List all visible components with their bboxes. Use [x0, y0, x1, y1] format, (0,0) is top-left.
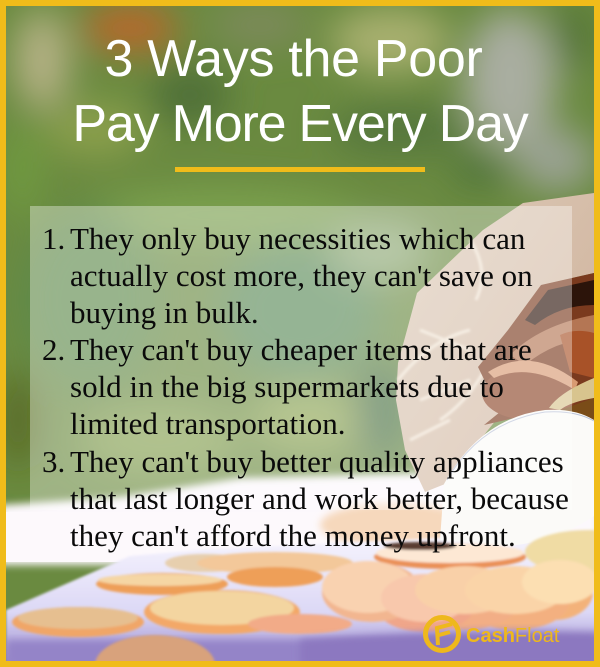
CashFloat logo: [423, 615, 560, 653]
title: Pay More Every Day: [72, 95, 528, 153]
white band: [0, 468, 600, 565]
title: 3 Ways the Poor: [105, 30, 482, 88]
sack: [396, 193, 594, 492]
item 2: [42, 332, 532, 441]
item 3: they can't afford the money upfront.: [70, 518, 516, 553]
white coin: [440, 410, 594, 546]
item 2: sold in the big supermarkets due to: [70, 369, 504, 404]
item 3: [42, 444, 569, 553]
item 1: They only buy necessities which can: [70, 221, 525, 256]
item 2: They can't buy cheaper items that are: [70, 332, 532, 367]
icon: logo coin: [426, 618, 458, 650]
item 1: actually cost more, they can't save on: [70, 258, 533, 293]
numbered list: 1.: [42, 221, 65, 256]
translucent text panel: [30, 206, 572, 510]
table: [6, 530, 600, 667]
item 3: that last longer and work better, because: [70, 481, 569, 516]
logo wordmark: CashFloat: [466, 625, 560, 647]
item 1: buying in bulk.: [70, 295, 259, 330]
numbered list: 3.: [42, 444, 65, 479]
item 1: [42, 221, 533, 330]
item 3: They can't buy better quality appliances: [70, 444, 564, 479]
item 2: limited transportation.: [70, 406, 346, 441]
title underline: [175, 167, 425, 172]
title: [72, 30, 529, 153]
peach blur behind text: [320, 503, 470, 547]
coins: [12, 530, 600, 667]
numbered list: 2.: [42, 332, 65, 367]
